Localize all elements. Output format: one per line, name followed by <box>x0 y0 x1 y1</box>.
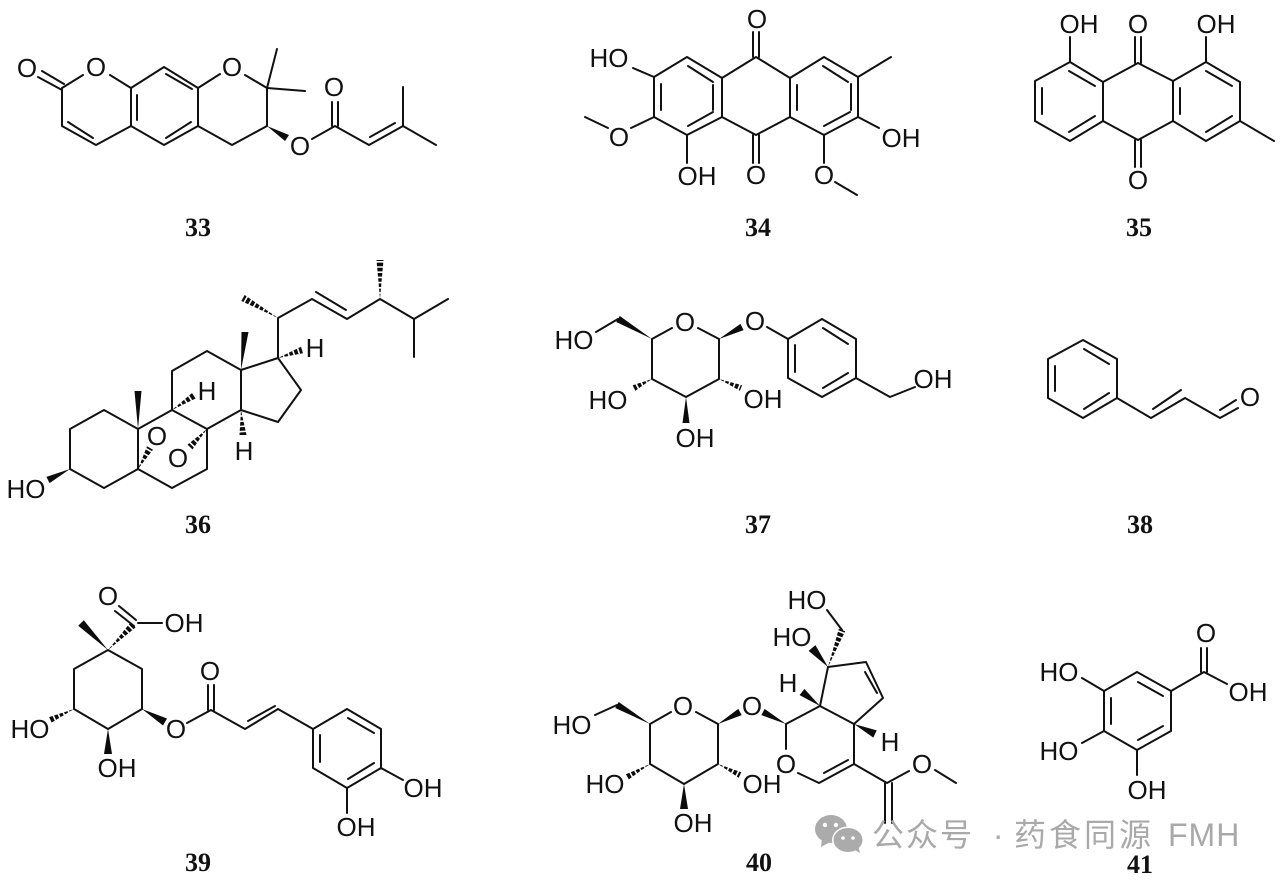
compound 35 structure <box>1035 9 1274 195</box>
compound 39 structure: OH <box>336 812 376 842</box>
compound 41 structure: HO <box>1040 736 1078 766</box>
compound 39 structure: O <box>200 656 220 686</box>
watermark text: FMH <box>1168 817 1240 853</box>
compound 37 structure: OH <box>744 384 782 414</box>
compound 41 structure: OH <box>1128 775 1166 805</box>
watermark text: 药食同源 <box>1014 817 1154 853</box>
compound 36 structure <box>6 258 448 504</box>
label 33: 33 <box>185 213 211 242</box>
compound 35 structure: O <box>1128 165 1148 195</box>
compound 36 structure: H <box>198 376 216 406</box>
compound 33 structure: O <box>17 53 37 83</box>
compound 40 structure: OH <box>674 808 712 838</box>
icon: WeChat watermark logo <box>815 815 864 854</box>
compound 34 structure: HO <box>590 43 628 73</box>
compound 38 structure: O <box>1240 382 1260 412</box>
compound 36 structure: HO <box>6 474 46 504</box>
compound 34 structure: O <box>814 160 834 190</box>
compound 33 structure <box>17 49 436 161</box>
label 39: 39 <box>185 848 211 877</box>
compound 40 structure: HO <box>552 710 592 740</box>
compound 41 structure <box>1040 618 1268 805</box>
label 36: 36 <box>185 510 211 539</box>
compound 40 structure: O <box>673 691 693 721</box>
compound 34 structure: OH <box>678 161 716 191</box>
label 37: 37 <box>745 510 771 539</box>
compound 36 structure: O <box>168 443 188 473</box>
compound 34 structure: O <box>746 160 766 190</box>
compound 39 structure: O <box>166 714 186 744</box>
compound 39 structure: HO <box>10 714 50 744</box>
compound 39 structure: OH <box>404 773 442 803</box>
compound 35 structure: O <box>1128 9 1148 39</box>
watermark text: 公众号 <box>872 817 974 853</box>
compound 39 structure: OH <box>98 753 136 783</box>
compound 33 structure: O <box>324 72 344 102</box>
compound 39 structure: O <box>98 581 118 611</box>
compound 37 structure: O <box>675 307 695 337</box>
compound 39 structure <box>10 581 442 842</box>
compound 34 structure <box>585 4 920 195</box>
compound 41 structure: HO <box>1040 657 1078 687</box>
label 34: 34 <box>745 213 771 242</box>
compound 37 structure: OH <box>676 423 714 453</box>
compound 37 structure: HO <box>554 325 594 355</box>
compound 37 structure <box>554 306 952 453</box>
compound 40 structure: HO <box>772 622 812 652</box>
compound 40 structure: HO <box>586 769 624 799</box>
watermark text: · <box>982 817 1016 853</box>
compound 36 structure: O <box>147 421 167 451</box>
label 41: 41 <box>1127 850 1153 879</box>
compound 35 structure: OH <box>1196 9 1236 39</box>
label 35: 35 <box>1126 213 1152 242</box>
compound 33 structure: O <box>86 52 106 82</box>
compound 33 structure: O <box>222 52 242 82</box>
compound 33 structure: O <box>290 131 310 161</box>
compound 40 structure: H <box>779 668 797 698</box>
compound 40 structure: H <box>881 727 899 757</box>
label 38: 38 <box>1127 510 1153 539</box>
label 40: 40 <box>746 848 772 877</box>
compound 37 structure: OH <box>914 364 952 394</box>
compound 37 structure: O <box>745 306 765 336</box>
compound 38 structure <box>1048 340 1260 418</box>
compound 34 structure: O <box>609 122 629 152</box>
compound 37 structure: HO <box>588 385 628 415</box>
compound 35 structure: OH <box>1060 9 1098 39</box>
compound 40 structure: HO <box>788 585 826 615</box>
compound 40 structure: O <box>912 749 932 779</box>
compound 40 structure <box>552 585 956 838</box>
compound 40 structure: OH <box>742 769 782 799</box>
compound 39 structure: OH <box>164 608 204 638</box>
compound 34 structure: O <box>747 4 767 34</box>
compound 40 structure: O <box>776 749 796 779</box>
compound 40 structure: O <box>742 691 762 721</box>
compound 41 structure: O <box>1196 618 1216 648</box>
compound 41 structure: OH <box>1228 677 1268 707</box>
compound 34 structure: OH <box>882 123 920 153</box>
compound 36 structure: H <box>306 333 324 363</box>
compound 36 structure: H <box>235 436 253 466</box>
